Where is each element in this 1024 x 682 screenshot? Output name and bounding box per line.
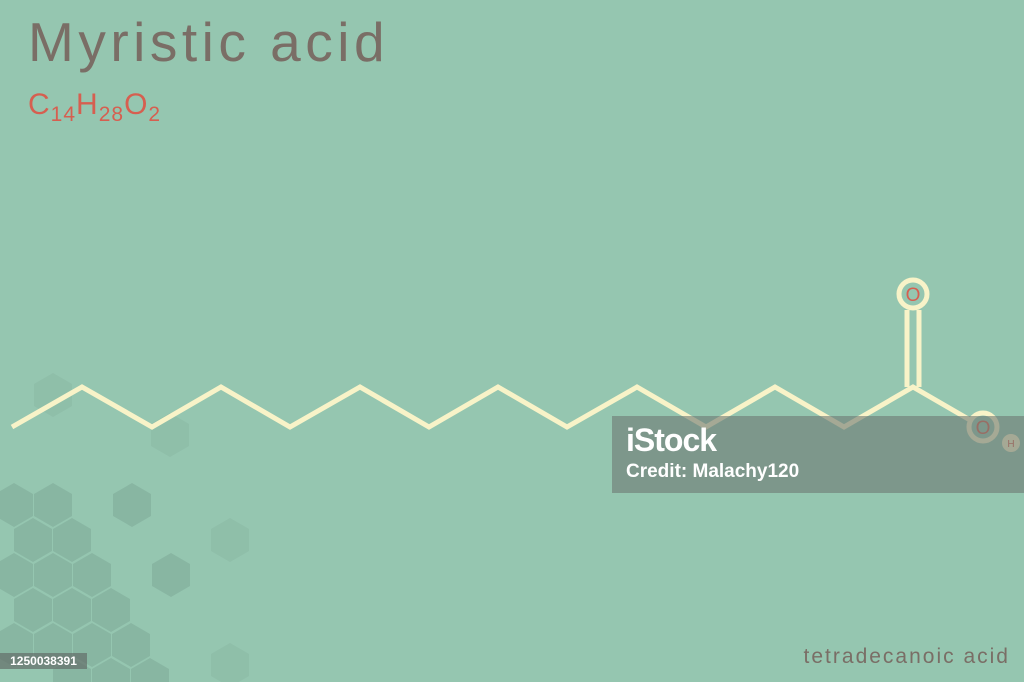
molecule structure: H bbox=[1007, 439, 1015, 450]
molecule structure: O bbox=[906, 285, 920, 306]
molecule structure: O bbox=[976, 418, 990, 439]
watermark bar: iStock bbox=[626, 422, 716, 458]
watermark bar: Credit: Malachy120 bbox=[626, 461, 799, 482]
id label bbox=[0, 653, 87, 669]
title: Myristic acid bbox=[28, 11, 389, 73]
id label: 1250038391 bbox=[10, 654, 77, 668]
subtitle: tetradecanoic acid bbox=[804, 645, 1010, 668]
formula: C14H28O2 bbox=[28, 88, 161, 126]
watermark bar bbox=[612, 416, 1024, 493]
